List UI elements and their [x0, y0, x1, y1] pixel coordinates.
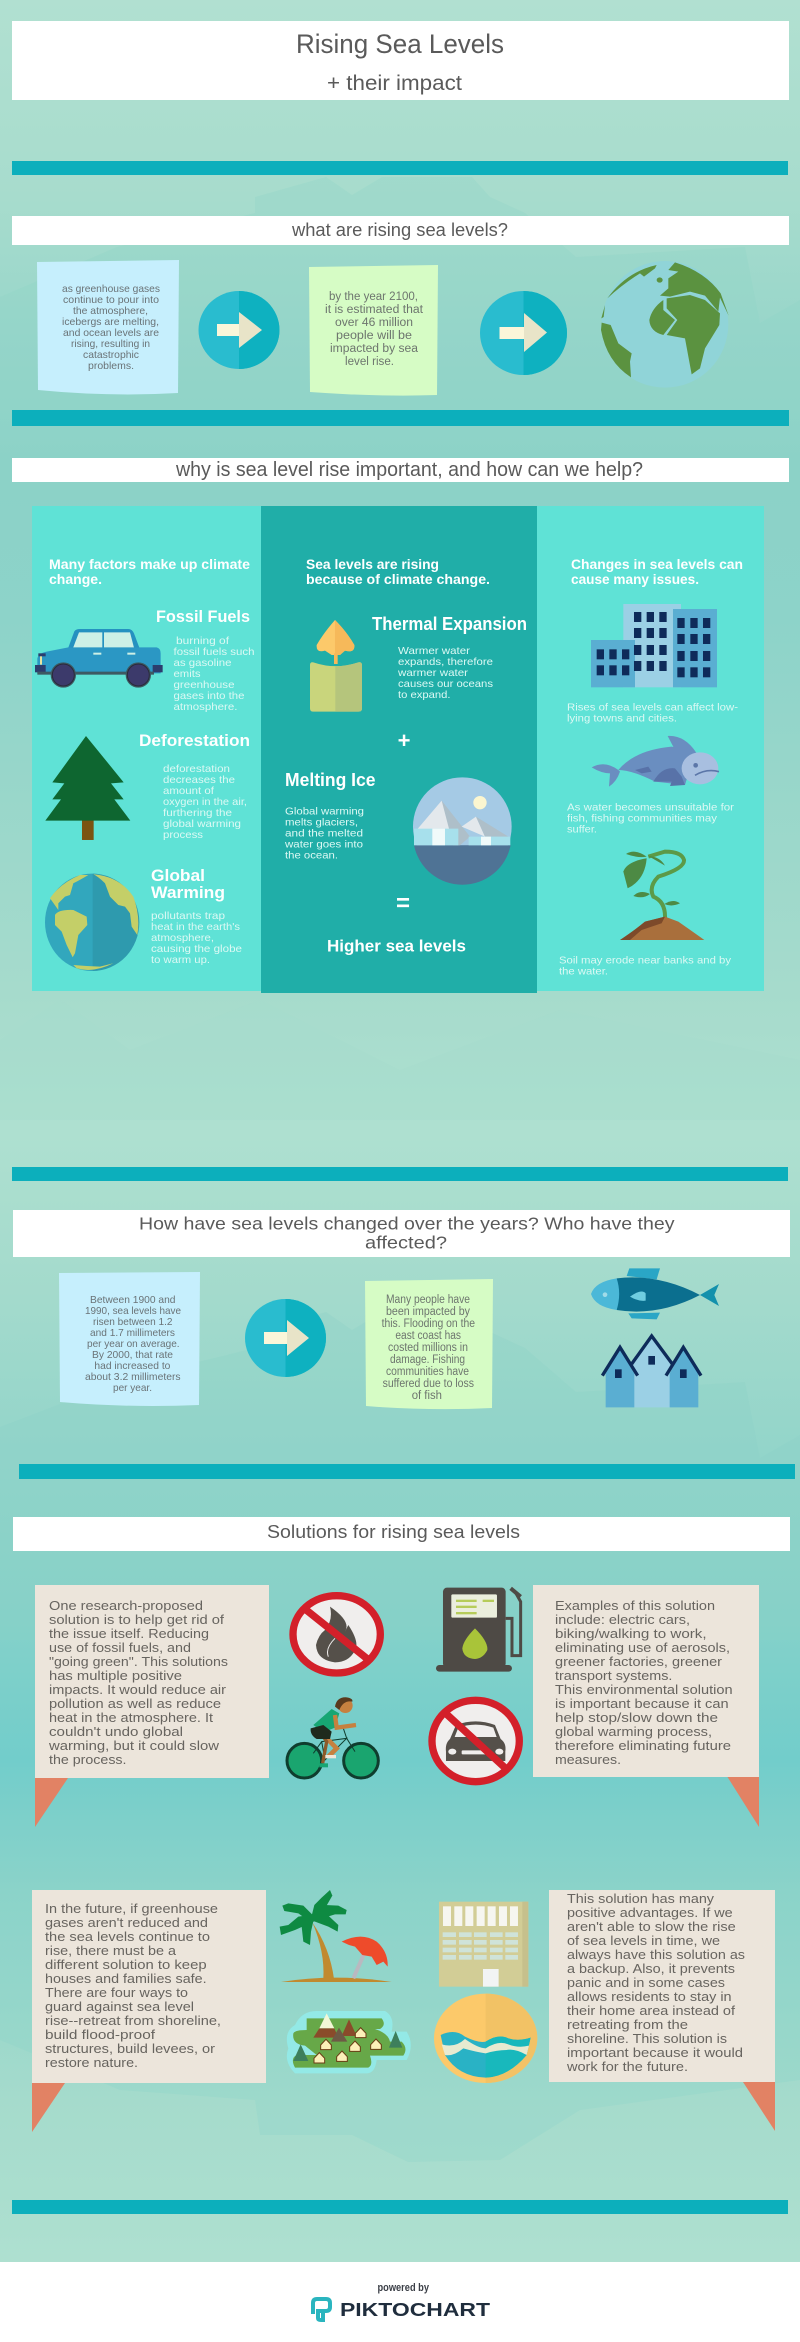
callout: solution advantages: a backup. Also, it prevents: [567, 1962, 735, 1976]
callout: research-proposed solution: heat in the atmosphere. It: [49, 1711, 214, 1725]
icon: palm and umbrella: [280, 1890, 392, 1982]
text: soil: [559, 954, 732, 978]
callout: solution advantages: panic and in some cases: [567, 1976, 725, 1990]
callout: solution advantages: work for the future.: [566, 2060, 688, 2074]
heading: what are rising sea levels: what are rising sea levels?: [291, 220, 508, 240]
arrow 3: [245, 1299, 326, 1377]
text: fossil fuels: fossil fuels such: [174, 646, 255, 658]
callout: research-proposed solution: impacts. It would reduce air: [49, 1683, 226, 1697]
heading: global warming: Warming: [151, 883, 225, 902]
callout: solution advantages: their home area instead of: [567, 2004, 736, 2018]
callout: solution advantages: aren't able to slow the rise: [567, 1920, 736, 1934]
panel: causes: [32, 506, 261, 991]
divider bar 1: [12, 161, 788, 175]
text: towns: Rises of sea levels can affect low-: [567, 702, 739, 714]
note: greenhouse gases: catastrophic: [83, 349, 139, 361]
text: thermal expansion: [397, 645, 493, 701]
effects intro: [571, 556, 743, 587]
icon: blue fish: [591, 1268, 719, 1319]
text: thermal expansion: warmer water: [397, 667, 469, 679]
text: thermal expansion: Warmer water: [398, 645, 471, 657]
callout: research-proposed solution: warming, but it could slow: [48, 1739, 220, 1753]
note: sea level history: per year on average.: [87, 1338, 180, 1350]
heading: fossil fuels: Fossil Fuels: [156, 607, 250, 626]
heading: what are rising sea levels: [12, 216, 789, 245]
callout: research-proposed solution: has multiple positive: [49, 1669, 182, 1683]
footer: [0, 2262, 800, 2342]
text: fossil fuels: greenhouse: [174, 679, 235, 691]
callout: protect houses: rise, there must be a: [45, 1944, 176, 1958]
icon: tree: [45, 736, 130, 840]
brand name: PIKTOCHART: [340, 2300, 490, 2320]
callout: solution advantages: of sea levels in time, we: [567, 1934, 720, 1948]
note: greenhouse gases: continue to pour into: [63, 294, 159, 306]
icon: green fuel pump: [436, 1588, 521, 1672]
note: who is affected: costed millions in: [388, 1342, 468, 1354]
callout: research-proposed solution: couldn't undo global: [49, 1725, 183, 1739]
text: thermal expansion: causes our oceans: [398, 678, 493, 690]
text: global warming: to warm up.: [151, 954, 210, 966]
text: global warming: [151, 910, 242, 966]
callout: solution examples: Examples of this solution: [555, 1599, 715, 1613]
icon: houses: [602, 1336, 701, 1407]
note: greenhouse gases: and ocean levels are: [63, 327, 159, 339]
text: deforestation: global warming: [163, 818, 241, 830]
callout: protect houses: There are four ways to: [45, 1986, 188, 2000]
callout: protect houses: [32, 1890, 266, 2132]
note: sea level history: [59, 1272, 200, 1406]
text: global warming: causing the globe: [151, 943, 242, 955]
divider bar 3: [12, 1167, 788, 1181]
note: who is affected: of fish: [412, 1390, 442, 1402]
title: Rising Sea Levels: [296, 29, 504, 59]
callout: protect houses: build flood-proof: [45, 2028, 156, 2042]
arrow 2: [480, 291, 567, 375]
callout: protect houses: guard against sea level: [45, 2000, 194, 2014]
callout: solution advantages: important because it would: [567, 2046, 743, 2060]
heading: why is sea level rise important: why is sea level rise important, and how can we help?: [175, 459, 643, 481]
note: greenhouse gases: problems.: [88, 360, 134, 372]
callout: research-proposed solution: One research-proposed: [49, 1599, 203, 1613]
callout: protect houses: the sea levels continue to: [45, 1930, 210, 1944]
callout: solution advantages: shoreline. This solution is: [567, 2032, 727, 2046]
text: fossil fuels: [174, 635, 255, 713]
text: melting ice: melts glaciers,: [285, 816, 358, 828]
note: by the year 2100: impacted by sea: [330, 343, 419, 355]
note: sea level history: and 1.7 millimeters: [90, 1327, 175, 1339]
heading: melting ice: Melting Ice: [285, 770, 376, 790]
note: by the year 2100: people will be: [336, 330, 412, 342]
callout: solution examples: is important because it can: [555, 1697, 729, 1711]
text: global warming: heat in the earth's: [151, 921, 240, 933]
text: towns: [567, 702, 739, 724]
callout: solution advantages: allows residents to stay in: [567, 1990, 732, 2004]
callout: solution advantages: positive advantages. If we: [567, 1906, 733, 1920]
icon: piktochart logo: [313, 2299, 330, 2320]
icon: green globe: [601, 261, 729, 388]
equation intro: Sea levels are rising: [306, 556, 439, 572]
text: fish: fish, fishing communities may: [567, 812, 718, 824]
note: who is affected: communities have: [386, 1366, 469, 1378]
text: deforestation: process: [163, 829, 203, 841]
heading: thermal expansion: Thermal Expansion: [372, 614, 527, 634]
callout: research-proposed solution: pollution as well as reduce: [49, 1697, 221, 1711]
panel: effects: [537, 506, 764, 991]
note: sea level history: 1990, sea levels have: [85, 1305, 181, 1317]
text: towns: lying towns and cities.: [567, 712, 677, 724]
note: sea level history: about 3.2 millimeters: [85, 1371, 181, 1383]
text: fossil fuels: emits: [174, 668, 200, 680]
note: sea level history: had increased to: [94, 1360, 171, 1372]
callout: solution examples: greener factories, greener: [555, 1655, 722, 1669]
callout: protect houses: restore nature.: [45, 2056, 138, 2070]
heading: how have sea levels changed: [13, 1210, 790, 1257]
callout: solution examples: eliminating use of aerosols,: [555, 1641, 730, 1655]
note: by the year 2100: it is estimated that: [325, 304, 424, 316]
note: sea level history: risen between 1.2: [93, 1316, 173, 1328]
note: who is affected: [365, 1279, 493, 1409]
note: who is affected: this. Flooding on the: [382, 1318, 475, 1330]
heading: solutions: [13, 1517, 790, 1551]
text: fossil fuels: atmosphere.: [174, 701, 238, 713]
callout: research-proposed solution: [35, 1585, 269, 1827]
callout: solution examples: measures.: [555, 1753, 621, 1767]
icon: candle: [310, 620, 362, 712]
result: higher sea levels: Higher sea levels: [327, 936, 466, 956]
callout: research-proposed solution: solution is to help get rid of: [49, 1613, 225, 1627]
effects intro: cause many issues.: [571, 571, 699, 587]
note: by the year 2100: level rise.: [345, 356, 394, 368]
callout: solution advantages: always have this solution as: [567, 1948, 745, 1962]
equals sign: =: [396, 890, 410, 917]
note: sea level history: By 2000, that rate: [92, 1349, 173, 1361]
icon: car: [35, 629, 163, 688]
callout: solution examples: help stop/slow down the: [555, 1711, 718, 1725]
divider bar 5: [12, 2200, 788, 2214]
heading: global warming: Global: [151, 866, 205, 885]
note: sea level history: Between 1900 and: [90, 1294, 176, 1306]
callout: protect houses: houses and families safe.: [45, 1972, 207, 1986]
callout: protect houses: different solution to keep: [45, 1958, 207, 1972]
callout: protect houses: In the future, if greenhouse: [45, 1902, 218, 1916]
note: who is affected: Many people have: [386, 1294, 470, 1306]
note: greenhouse gases: rising, resulting in: [71, 338, 150, 350]
text: fossil fuels: burning of: [176, 635, 229, 647]
text: soil: Soil may erode near banks and by: [559, 954, 732, 966]
callout: solution advantages: [549, 1890, 775, 2131]
equation intro: because of climate change.: [306, 571, 490, 587]
text: melting ice: the ocean.: [285, 850, 338, 862]
text: melting ice: water goes into: [284, 838, 363, 850]
text: fish: suffer.: [567, 824, 597, 836]
panel: climate change equation: [261, 506, 537, 993]
heading: solutions: Solutions for rising sea levels: [267, 1521, 520, 1542]
note: who is affected: damage. Fishing: [390, 1354, 465, 1366]
text: thermal expansion: to expand.: [398, 689, 450, 701]
icon: cyclist: [287, 1697, 378, 1778]
title banner: [12, 21, 789, 100]
note: who is affected: east coast has: [395, 1330, 461, 1342]
text: fossil fuels: gases into the: [174, 690, 245, 702]
note: greenhouse gases: the atmosphere,: [73, 305, 148, 317]
text: deforestation: amount of: [163, 785, 214, 797]
arrow 1: [198, 291, 280, 369]
note: by the year 2100: over 46 million: [335, 317, 413, 329]
icon: city buildings: [591, 604, 717, 687]
text: fish: As water becomes unsuitable for: [567, 802, 735, 814]
callout: solution examples: include: electric cars,: [555, 1613, 690, 1627]
callout: research-proposed solution: use of fossil fuels, and: [49, 1641, 191, 1655]
note: who is affected: been impacted by: [386, 1306, 470, 1318]
text: melting ice: and the melted: [285, 828, 363, 840]
icon: sea wave circle: [434, 1994, 537, 2083]
text: soil: the water.: [559, 966, 608, 978]
causes intro: Many factors make up climate: [49, 556, 250, 572]
note: greenhouse gases: icebergs are melting,: [62, 316, 159, 328]
text: fish: [567, 802, 735, 836]
icon: melting ice circle: [413, 777, 512, 885]
callout: solution advantages: retreating from the: [567, 2018, 688, 2032]
text: deforestation: [163, 763, 247, 841]
callout: protect houses: rise--retreat from shoreline,: [45, 2014, 221, 2028]
callout: protect houses: structures, build levees, or: [45, 2042, 215, 2056]
divider bar 4: [19, 1464, 795, 1479]
icon: no car: [432, 1700, 519, 1782]
plus sign: +: [398, 728, 410, 753]
icon: island village: [287, 2011, 411, 2073]
icon: sad fish: [592, 736, 719, 787]
note: who is affected: suffered due to loss: [383, 1378, 474, 1390]
text: global warming: pollutants trap: [151, 910, 225, 922]
effects intro: Changes in sea levels can: [571, 556, 743, 572]
text: thermal expansion: expands, therefore: [398, 656, 493, 668]
icon: flood-proof building: [439, 1902, 528, 1987]
heading: how have sea levels changed: How have sea levels changed over the years? Who have they: [139, 1214, 675, 1234]
callout: research-proposed solution: the issue itself. Reducing: [49, 1627, 209, 1641]
callout: solution examples: biking/walking to work,: [555, 1627, 707, 1641]
heading: global warming: [151, 866, 225, 902]
callout: research-proposed solution: "going green". This solutions: [49, 1655, 228, 1669]
text: fossil fuels: as gasoline: [174, 657, 232, 669]
note: by the year 2100: by the year 2100,: [329, 291, 418, 303]
callout: solution advantages: This solution has many: [567, 1892, 715, 1906]
callout: solution examples: transport systems.: [555, 1669, 672, 1683]
note: by the year 2100: [309, 265, 438, 396]
text: deforestation: decreases the: [163, 774, 235, 786]
callout: solution examples: global warming process,: [555, 1725, 712, 1739]
subtitle: + their impact: [327, 72, 462, 95]
callout: protect houses: gases aren't reduced and: [45, 1916, 208, 1930]
text: deforestation: furthering the: [163, 807, 232, 819]
text: melting ice: Global warming: [285, 806, 364, 818]
powered by label: powered by: [378, 2282, 430, 2294]
heading: why is sea level rise important: [12, 458, 789, 482]
heading: how have sea levels changed: affected?: [365, 1232, 447, 1252]
equation intro: [306, 556, 490, 587]
note: sea level history: per year.: [113, 1382, 152, 1394]
text: global warming: atmosphere,: [151, 932, 214, 944]
note: greenhouse gases: as greenhouse gases: [62, 283, 160, 295]
icon: earth: [45, 874, 139, 971]
causes intro: change.: [49, 571, 102, 587]
callout: solution examples: This environmental solution: [555, 1683, 733, 1697]
text: deforestation: oxygen in the air,: [163, 796, 247, 808]
callout: solution examples: therefore eliminating future: [555, 1739, 731, 1753]
divider bar 2: [12, 410, 789, 426]
text: melting ice: [284, 806, 364, 862]
note: greenhouse gases: [37, 260, 179, 394]
causes intro: [49, 556, 250, 587]
icon: no fire: [293, 1596, 380, 1673]
text: deforestation: deforestation: [163, 763, 230, 775]
heading: deforestation: Deforestation: [139, 731, 250, 750]
icon: sprout: [620, 852, 704, 940]
callout: solution examples: [533, 1585, 759, 1827]
callout: research-proposed solution: the process.: [49, 1753, 126, 1767]
